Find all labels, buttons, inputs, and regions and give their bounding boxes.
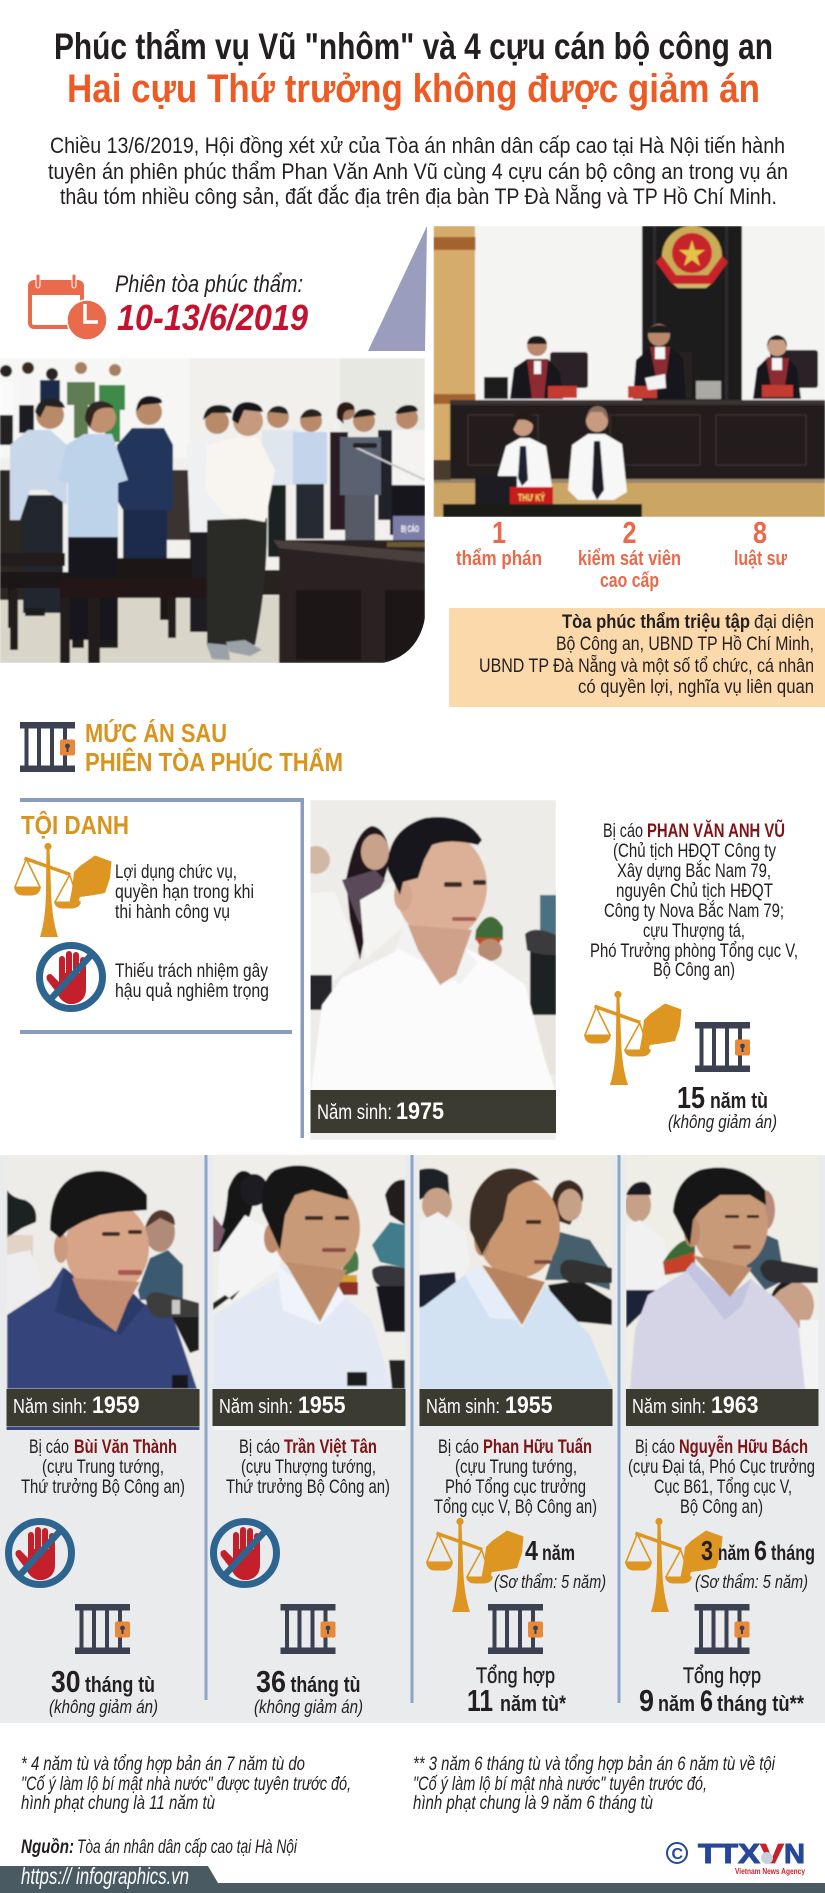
birth year bar — [420, 1389, 612, 1426]
charge: abuse of power: Lợi dụng chức vụ, — [115, 862, 237, 883]
source — [21, 1837, 298, 1858]
defendant: Trần Việt Tân — [214, 1437, 390, 1717]
reduced sentence: 6 — [754, 1535, 767, 1566]
sentence: (không giảm án) — [49, 1697, 158, 1717]
logo: TTXVN: TTX — [698, 1838, 760, 1869]
total sentence: năm — [658, 1691, 695, 1716]
birth year bar: Năm sinh: — [426, 1396, 500, 1418]
birth year bar: 1963 — [711, 1392, 758, 1419]
footnote: Phan Hữu Tuấn: hình phạt chung là 11 năm tù — [21, 1793, 215, 1814]
count: judges: thẩm phán — [456, 548, 542, 570]
section heading with jail icon: MỨC ÁN SAU — [85, 718, 227, 748]
logo: TTXVN: N — [784, 1838, 805, 1869]
photo: Phan Hữu Tuấn — [419, 1155, 613, 1431]
defendant: Trần Việt Tân: (cựu Thượng tướng, — [241, 1457, 376, 1478]
photo: judges and court clerks — [434, 226, 825, 517]
icon: scales and hand — [426, 1518, 524, 1612]
birth year bar: 1975 — [396, 1098, 444, 1125]
panel: summoned parties — [449, 608, 825, 707]
count: prosecutors: 2 — [622, 515, 636, 550]
defendant: Phan Văn Anh Vũ details: nguyên Chủ tịch HĐQT — [616, 881, 773, 902]
reduced sentence: năm — [542, 1542, 575, 1565]
source: Tòa án nhân dân cấp cao tại Hà Nội — [77, 1837, 298, 1858]
panel: charges: TỘI DANH — [21, 810, 129, 840]
birth year bar — [310, 1090, 556, 1133]
count: lawyers: luật sư — [734, 548, 787, 570]
reduced sentence — [494, 1535, 606, 1592]
footnote: Phan Hữu Tuấn — [21, 1754, 351, 1814]
defendant: Bùi Văn Thành: Bị cáo — [29, 1437, 69, 1458]
photo: Nguyễn Hữu Bách — [625, 1155, 819, 1431]
session date: Phiên tòa phúc thẩm: — [115, 271, 303, 298]
defendant: Phan Văn Anh Vũ details: Bộ Công an) — [653, 960, 735, 981]
defendant: Trần Việt Tân: Trần Việt Tân — [284, 1437, 377, 1458]
panel: charges — [14, 798, 304, 1138]
defendant: Phan Văn Anh Vũ details: Bị cáo — [603, 821, 643, 842]
count: lawyers: 8 — [753, 515, 767, 550]
defendant: Bùi Văn Thành: (cựu Trung tướng, — [42, 1457, 164, 1478]
birth year bar: 1959 — [92, 1392, 140, 1419]
icon: stop hand — [214, 1522, 276, 1584]
defendant: Bùi Văn Thành: Thứ trưởng Bộ Công an) — [21, 1477, 185, 1498]
footnote: Nguyễn Hữu Bách: hình phạt chung là 9 năm 6 tháng tù — [413, 1793, 653, 1814]
sentence: Vũ: (không giảm án) — [668, 1112, 777, 1132]
total sentence: tháng tù** — [717, 1691, 804, 1716]
reduced sentence: (Sơ thẩm: 5 năm) — [494, 1572, 606, 1592]
defendant: Nguyễn Hữu Bách: Bộ Công an) — [680, 1497, 763, 1518]
photo: Trần Việt Tân — [212, 1155, 406, 1431]
icon: jail — [694, 1604, 750, 1654]
charge: abuse of power: thi hành công vụ — [115, 902, 230, 923]
birth year bar — [212, 1389, 406, 1426]
defendant: Phan Văn Anh Vũ details: (Chủ tịch HĐQT Công ty — [613, 841, 776, 862]
panel: four former officers — [0, 1155, 825, 1723]
birth year bar — [626, 1389, 818, 1426]
intro text — [48, 133, 788, 209]
birth year bar: Năm sinh: — [317, 1101, 392, 1124]
sentence: Vũ: năm tù — [710, 1088, 768, 1113]
defendant: Bùi Văn Thành: Bùi Văn Thành — [74, 1437, 177, 1458]
sentence: Vũ: 15 — [677, 1080, 705, 1115]
birth year bar: 1955 — [298, 1392, 346, 1419]
defendant: Phan Hữu Tuấn: (cựu Trung tướng, — [455, 1457, 577, 1478]
count: judges: 1 — [492, 515, 506, 550]
photo: Phan Văn Anh Vũ — [302, 800, 556, 1140]
charge: negligence: Thiếu trách nhiệm gây — [115, 961, 268, 982]
sentence: tháng tù — [290, 1672, 360, 1697]
sentence: 36 — [256, 1664, 286, 1699]
footnote: Nguyễn Hữu Bách — [413, 1754, 776, 1814]
total sentence — [639, 1663, 804, 1718]
defendant: Phan Hữu Tuấn: Bị cáo — [438, 1437, 479, 1458]
title — [54, 26, 773, 111]
defendant: Bùi Văn Thành — [8, 1437, 185, 1717]
photo: defendants standing in court — [0, 358, 425, 663]
defendant: Phan Hữu Tuấn: Phó Tổng cục trưởng — [445, 1477, 586, 1498]
total sentence: Tổng hợp — [476, 1663, 555, 1688]
sentence: Vũ — [584, 991, 777, 1132]
count: prosecutors: cao cấp — [600, 570, 659, 592]
logo: TTXVN: Vietnam News Agency — [735, 1866, 805, 1876]
count: prosecutors: kiểm sát viên — [578, 548, 681, 570]
footer bar with website: https:// infographics.vn — [21, 1863, 189, 1889]
total sentence — [467, 1663, 566, 1718]
charge: negligence — [115, 961, 269, 1002]
panel: summoned parties: đại diện — [754, 612, 814, 633]
birth year bar: 1955 — [505, 1392, 552, 1419]
source: Nguồn: — [21, 1837, 74, 1858]
sentence: 30 — [51, 1664, 80, 1699]
session date: 10-13/6/2019 — [117, 297, 308, 338]
footer bar with website — [0, 1863, 825, 1893]
defendant: Nguyễn Hữu Bách — [625, 1436, 815, 1718]
count: judges — [456, 515, 542, 570]
defendant: Phan Hữu Tuấn: Tổng cục V, Bộ Công an) — [434, 1497, 597, 1518]
charge: negligence: hậu quả nghiêm trọng — [115, 981, 269, 1002]
sentence — [254, 1664, 363, 1717]
icon: scales and hand — [14, 843, 112, 937]
icon: jail — [75, 1604, 130, 1654]
column dividers — [204, 1155, 620, 1703]
birth year bar: Năm sinh: — [219, 1396, 293, 1418]
icon: calendar with clock — [30, 274, 107, 340]
section heading with jail icon — [20, 718, 343, 777]
panel: summoned parties: Tòa phúc thẩm triệu tập — [562, 612, 750, 633]
icon: jail — [488, 1604, 543, 1654]
section heading with jail icon: PHIÊN TÒA PHÚC THẨM — [85, 747, 343, 777]
defendant: Phan Hữu Tuấn: Phan Hữu Tuấn — [483, 1437, 592, 1458]
icon: stop hand — [8, 1522, 72, 1584]
logo: TTXVN: V — [760, 1838, 784, 1869]
total sentence: 11 — [467, 1683, 493, 1718]
icon: stop hand — [40, 946, 102, 1008]
reduced sentence: năm — [718, 1542, 750, 1565]
icon: scales and hand — [625, 1518, 722, 1612]
court composition counts — [456, 515, 787, 592]
birth year bar: Năm sinh: — [632, 1396, 706, 1418]
sentence: tháng tù — [85, 1672, 155, 1697]
reduced sentence: 4 — [525, 1535, 538, 1566]
footnote: Nguyễn Hữu Bách: "Cố ý làm lộ bí mật nhà nước" tuyên trước đó, — [413, 1774, 707, 1795]
birth year bar — [6, 1389, 200, 1426]
logo: TTXVN: C — [672, 1846, 684, 1863]
session date — [115, 271, 308, 338]
defendant: Nguyễn Hữu Bách: Bị cáo — [635, 1437, 675, 1458]
defendant: Phan Văn Anh Vũ details — [590, 820, 798, 981]
total sentence: năm tù* — [500, 1691, 566, 1716]
sentence: (không giảm án) — [254, 1697, 363, 1717]
decorative triangle — [368, 226, 427, 351]
total sentence: 6 — [700, 1685, 713, 1718]
defendant: Phan Văn Anh Vũ details: PHAN VĂN ANH VŨ — [647, 820, 785, 842]
defendant: Phan Văn Anh Vũ details: Xây dựng Bắc Nam 79, — [617, 860, 771, 882]
count: prosecutors — [578, 515, 681, 592]
footnote: Phan Hữu Tuấn: * 4 năm tù và tổng hợp bản án 7 năm tù do — [21, 1754, 305, 1775]
reduced sentence: 3 — [701, 1535, 713, 1566]
reduced sentence — [695, 1535, 815, 1592]
logo: TTXVN — [667, 1838, 805, 1876]
sentence — [49, 1664, 158, 1717]
photo: judges and court clerks: THƯ KÝ — [518, 491, 545, 504]
defendant: Phan Văn Anh Vũ details: cựu Thượng tá, — [643, 921, 745, 942]
charge: abuse of power: quyền hạn trong khi — [115, 882, 254, 903]
icon: jail — [280, 1604, 336, 1654]
photo: defendants standing in court: BỊ CÁO — [401, 524, 419, 534]
footnote: Phan Hữu Tuấn: "Cố ý làm lộ bí mật nhà nước" được tuyên trước đó, — [21, 1774, 351, 1795]
count: lawyers — [734, 515, 787, 570]
defendant: Phan Hữu Tuấn — [426, 1437, 606, 1718]
defendant: Trần Việt Tân: Bị cáo — [239, 1437, 280, 1458]
defendant: Trần Việt Tân: Thứ trưởng Bộ Công an) — [226, 1477, 390, 1498]
total sentence: 9 — [639, 1683, 654, 1718]
photo: Bùi Văn Thành — [6, 1155, 200, 1431]
birth year bar: Năm sinh: — [13, 1396, 87, 1418]
charge: abuse of power — [115, 862, 254, 923]
total sentence: Tổng hợp — [683, 1663, 761, 1688]
